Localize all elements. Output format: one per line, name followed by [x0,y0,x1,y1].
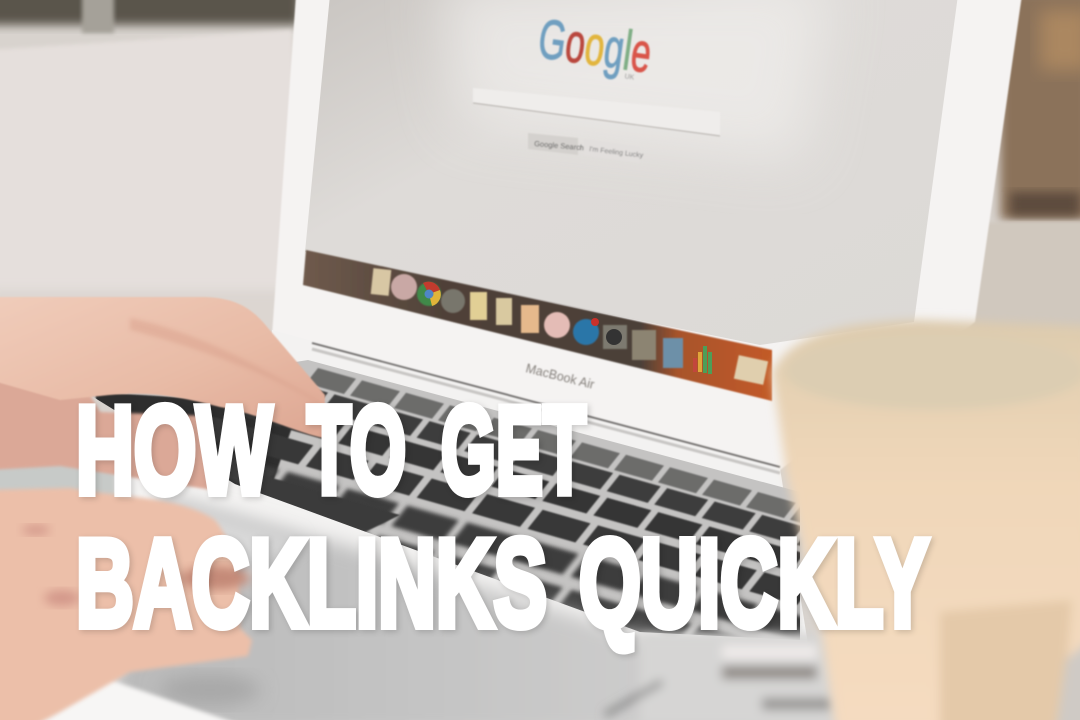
laptop lid and white bezel [272,0,1022,470]
laptop screen [303,0,958,401]
macbook label: MacBook Air [524,361,596,392]
search box [473,88,720,136]
title line 1: GET [441,382,586,520]
google search buttons [528,133,644,163]
title line 1: HOW [76,382,272,520]
title line 2: BACKLINKS [76,515,547,653]
coffee cup [772,320,1080,720]
google logo: UK [624,73,635,82]
google search buttons: Google Search [534,139,584,152]
title line 1 [76,382,586,520]
hands [0,297,325,720]
white object at lower left [40,678,250,720]
keyboard [93,360,800,640]
title [76,382,929,653]
google logo: Google [535,6,655,85]
laptop base [0,330,820,720]
palm rest [40,497,835,720]
glass on table [605,635,832,720]
hand: upper [0,297,325,490]
hand: lower [0,488,252,720]
title line 1: TO [307,382,406,520]
dock bar [303,250,772,401]
google search buttons: I'm Feeling Lucky [589,146,644,160]
